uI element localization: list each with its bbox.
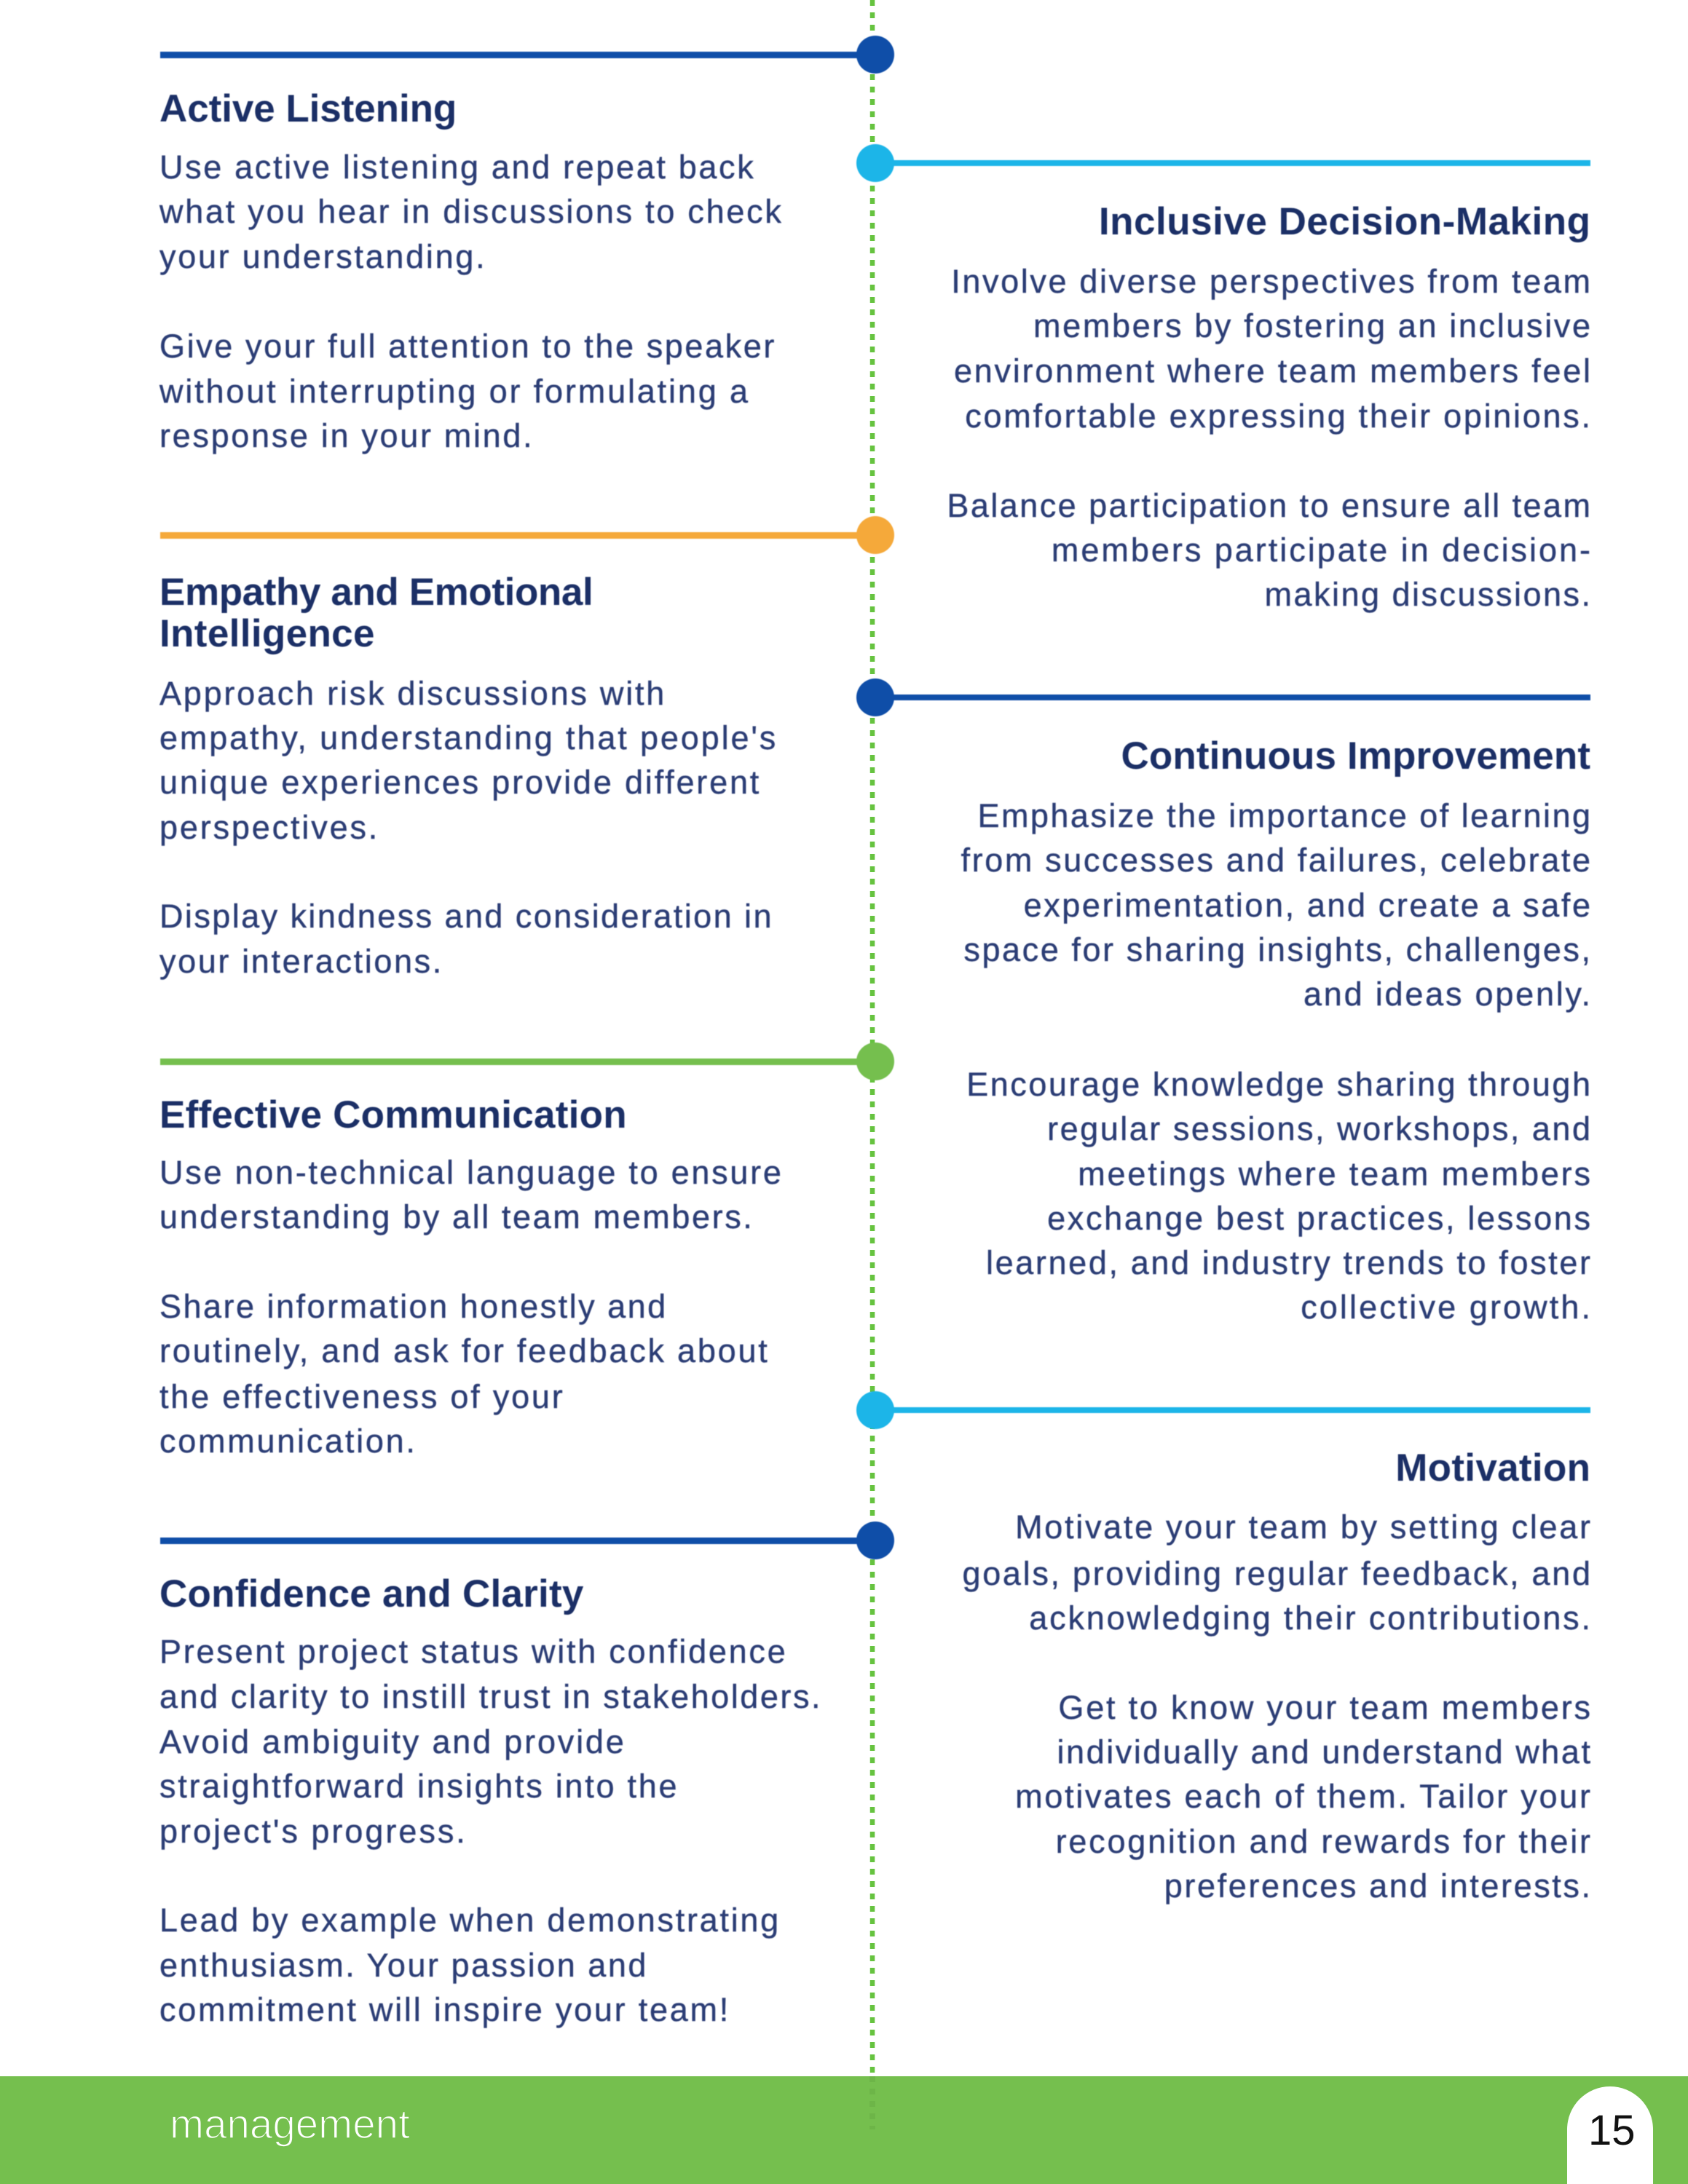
body text: motivates each of them. Tailor your — [1015, 1778, 1590, 1815]
body text: empathy, understanding that people's — [159, 719, 776, 756]
body text — [159, 149, 781, 454]
marker — [856, 36, 894, 74]
body text: exchange best practices, lessons — [1047, 1200, 1590, 1237]
body text: your interactions. — [159, 943, 441, 980]
body text: Avoid ambiguity and provide — [159, 1723, 624, 1760]
panel: continuous improvement — [856, 678, 1590, 1326]
marker — [856, 144, 894, 182]
body text — [963, 1508, 1590, 1904]
body text: collective growth. — [1301, 1289, 1590, 1326]
body text: acknowledging their contributions. — [1029, 1599, 1590, 1637]
body text: your understanding. — [159, 238, 485, 275]
body text: recognition and rewards for their — [1056, 1823, 1590, 1860]
body text: Encourage knowledge sharing through — [966, 1066, 1590, 1103]
timeline dotted line — [870, 0, 875, 2076]
body text: Involve diverse perspectives from team — [951, 263, 1590, 300]
heading: Effective Communication — [159, 1093, 627, 1136]
body text: understanding by all team members. — [159, 1198, 752, 1235]
rule — [160, 532, 875, 539]
body text: straightforward insights into the — [159, 1768, 677, 1805]
rule — [160, 1538, 875, 1544]
marker — [856, 1042, 894, 1080]
body text: from successes and failures, celebrate — [961, 842, 1590, 879]
heading: Empathy and Emotional — [159, 571, 593, 614]
body text: preferences and interests. — [1164, 1867, 1590, 1904]
panel: effective communication — [159, 1042, 894, 1460]
body text: and clarity to instill trust in stakeholders. — [159, 1678, 820, 1715]
body text — [961, 797, 1590, 1326]
panel: active listening — [159, 36, 894, 454]
body text — [159, 675, 776, 980]
marker — [856, 516, 894, 554]
body text: goals, providing regular feedback, and — [963, 1555, 1590, 1592]
body text: Give your full attention to the speaker — [159, 328, 774, 365]
heading: Motivation — [1395, 1447, 1590, 1489]
body text: the effectiveness of your — [159, 1378, 563, 1415]
body text: commitment will inspire your team! — [159, 1991, 728, 2028]
body text: Balance participation to ensure all team — [947, 487, 1590, 524]
rule — [875, 695, 1590, 700]
footer label: management — [170, 2101, 410, 2147]
body text: experimentation, and create a safe — [1024, 887, 1590, 924]
body text: without interrupting or formulating a — [159, 373, 749, 410]
body text — [159, 1154, 781, 1460]
footer band — [0, 2076, 1688, 2184]
body text: Emphasize the importance of learning — [977, 797, 1590, 834]
heading — [159, 571, 593, 655]
body text: Use active listening and repeat back — [159, 149, 754, 186]
body text: routinely, and ask for feedback about — [159, 1332, 768, 1369]
page number tab — [1567, 2086, 1653, 2184]
body text: individually and understand what — [1057, 1733, 1590, 1770]
heading: Active Listening — [159, 87, 457, 130]
heading: Inclusive Decision-Making — [1099, 200, 1590, 243]
panel: inclusive decision-making — [856, 144, 1590, 613]
page number: 15 — [1588, 2107, 1636, 2154]
body text: Use non-technical language to ensure — [159, 1154, 781, 1191]
body text: members participate in decision- — [1052, 531, 1590, 569]
body text: Approach risk discussions with — [159, 675, 664, 712]
panel: confidence and clarity — [159, 1522, 894, 2028]
body text — [159, 1633, 820, 2028]
body text: Get to know your team members — [1058, 1689, 1590, 1726]
body text: learned, and industry trends to foster — [986, 1244, 1590, 1281]
body text: making discussions. — [1264, 576, 1590, 613]
rule — [875, 1407, 1590, 1413]
panel: motivation — [856, 1391, 1590, 1904]
body text: meetings where team members — [1078, 1155, 1590, 1192]
body text: communication. — [159, 1423, 415, 1460]
body text: regular sessions, workshops, and — [1047, 1110, 1590, 1147]
faint dotted line continuation on footer — [869, 2076, 875, 2129]
body text: members by fostering an inclusive — [1033, 307, 1590, 344]
body text: response in your mind. — [159, 417, 532, 454]
body text: enthusiasm. Your passion and — [159, 1947, 646, 1984]
marker — [856, 678, 894, 716]
body text: unique experiences provide different — [159, 764, 760, 801]
body text: comfortable expressing their opinions. — [965, 397, 1590, 435]
body text — [947, 263, 1590, 613]
body text: Share information honestly and — [159, 1288, 666, 1325]
marker — [856, 1391, 894, 1429]
body text: Present project status with confidence — [159, 1633, 786, 1670]
panel: empathy and emotional intelligence — [159, 516, 894, 980]
rule — [160, 1059, 875, 1065]
body text: environment where team members feel — [954, 352, 1590, 389]
body text: Lead by example when demonstrating — [159, 1902, 778, 1939]
heading: Intelligence — [159, 612, 374, 655]
body text: space for sharing insights, challenges, — [963, 931, 1590, 968]
body text: Display kindness and consideration in — [159, 898, 772, 935]
body text: what you hear in discussions to check — [159, 193, 781, 230]
heading: Confidence and Clarity — [159, 1572, 584, 1615]
heading: Continuous Improvement — [1121, 735, 1590, 778]
marker — [856, 1522, 894, 1559]
tab shape — [1567, 2086, 1653, 2184]
body text: perspectives. — [159, 809, 377, 846]
rule — [160, 52, 875, 58]
body text: Motivate your team by setting clear — [1015, 1508, 1590, 1546]
body text: project's progress. — [159, 1813, 465, 1850]
rule — [875, 160, 1590, 166]
body text: and ideas openly. — [1304, 976, 1590, 1013]
